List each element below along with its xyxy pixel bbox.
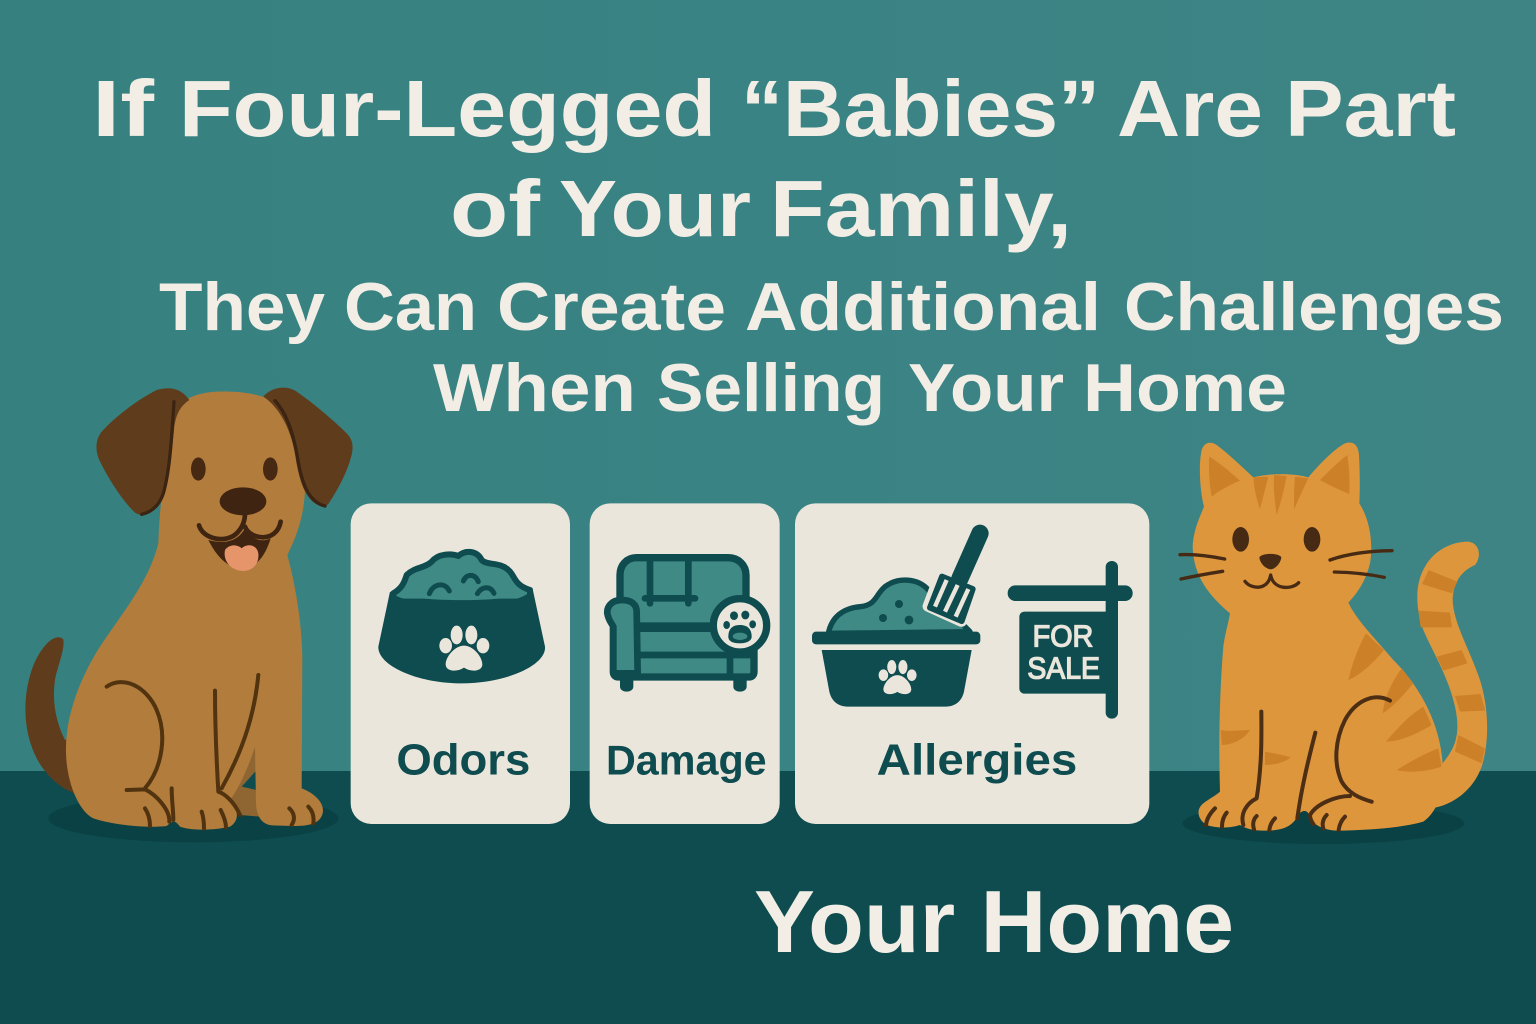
dog illustration xyxy=(25,388,353,842)
icon: scratched armchair xyxy=(607,558,767,692)
subtitle: Home xyxy=(1083,350,1287,426)
title: of xyxy=(450,164,540,253)
title: Are xyxy=(1117,64,1263,153)
label: odors: Odors xyxy=(396,735,530,784)
title: Four-Legged xyxy=(179,64,716,153)
subtitle: Can xyxy=(344,269,477,345)
card: odors xyxy=(351,503,570,824)
title xyxy=(92,64,1456,253)
title: Your xyxy=(559,164,751,253)
subtitle: Challenges xyxy=(1124,269,1504,345)
subtitle xyxy=(159,269,1504,426)
subtitle: When xyxy=(433,350,636,426)
label: damage: Damage xyxy=(606,737,767,783)
caption: your home: Your Home xyxy=(754,872,1234,971)
icon: pet food bowl xyxy=(378,552,545,683)
icon: for sale sign: SALE xyxy=(1027,652,1100,686)
floor xyxy=(0,771,1536,1024)
subtitle: Selling xyxy=(657,350,885,426)
label: allergies: Allergies xyxy=(877,735,1077,784)
icon: litter box and scoop xyxy=(812,533,980,707)
subtitle: Create xyxy=(497,269,726,345)
title: If xyxy=(92,64,154,153)
icon: for sale sign: FOR xyxy=(1033,620,1093,654)
subtitle: Your xyxy=(908,350,1064,426)
title: Family, xyxy=(770,164,1072,253)
subtitle: Additional xyxy=(745,269,1101,345)
subtitle: They xyxy=(159,269,325,345)
icon: for sale sign xyxy=(1008,561,1133,719)
card: damage xyxy=(590,503,780,824)
title: Part xyxy=(1285,64,1456,153)
background wall xyxy=(0,0,1536,772)
card: allergies xyxy=(795,503,1149,824)
title: “Babies” xyxy=(741,64,1100,153)
cat illustration xyxy=(1180,443,1487,844)
